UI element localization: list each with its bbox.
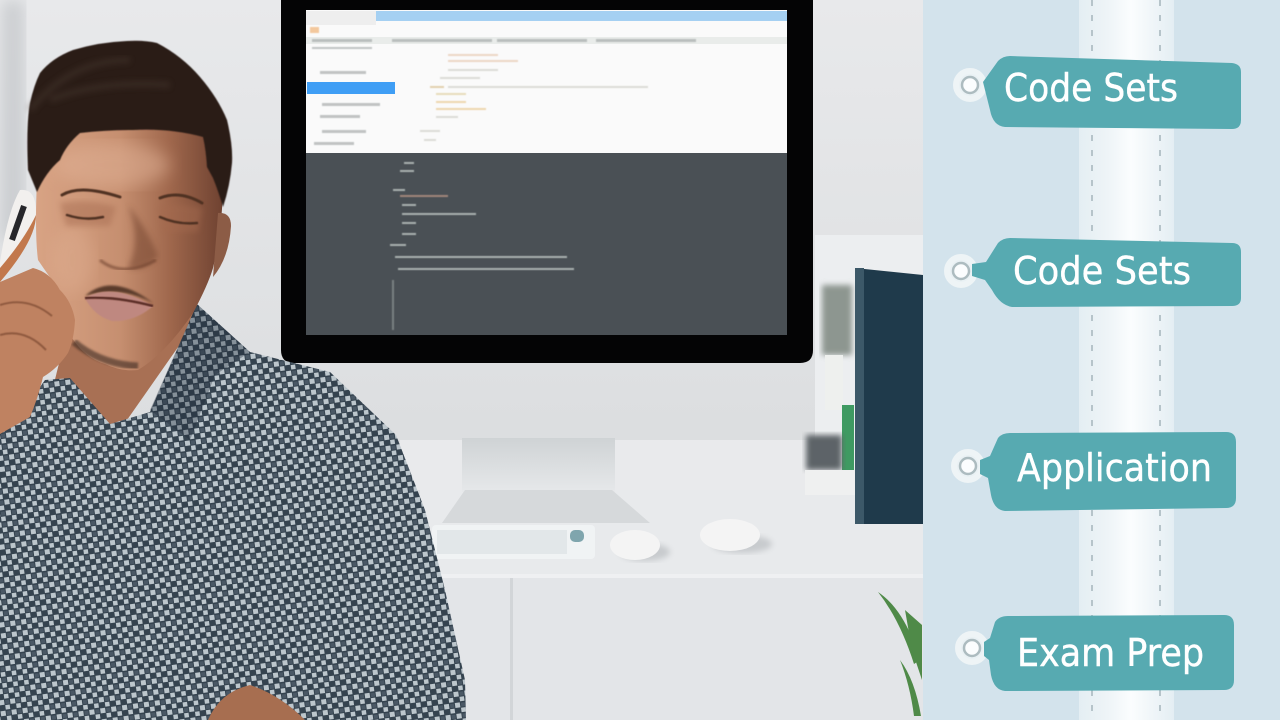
face [36,110,223,370]
moustache [85,286,153,303]
ring [956,71,984,99]
hair [27,41,232,207]
beard [74,342,138,366]
lips [85,292,153,321]
label: Exam Prep [958,615,1234,691]
mouse right [700,519,772,553]
forehead highlight [54,143,170,187]
ear [213,213,231,277]
selected sidebar row [307,82,395,94]
plant [878,592,922,716]
ring [958,634,986,662]
phone [0,190,36,282]
collar shadow [150,304,250,440]
keyboard [432,525,595,559]
tag [983,56,1241,129]
left wall shadow [2,0,24,240]
label: Application [954,432,1236,511]
ring [947,257,975,285]
editor light pane [306,10,787,153]
tag [972,238,1241,307]
monitor [281,0,813,363]
nose shadow [128,205,158,269]
text: Application [1017,446,1212,490]
background wall [0,0,923,720]
mouse left [610,530,670,561]
monitor bezel [281,0,813,363]
text: Code Sets [1004,66,1178,110]
hair fringe [30,60,170,110]
cheek highlight [50,226,94,294]
eye socket shadow [60,201,202,232]
person [0,41,466,720]
right panel [923,0,1280,720]
text: Exam Prep [1017,631,1204,675]
text: Code Sets [1013,249,1191,293]
shelf items [805,285,855,495]
desk back [400,440,815,490]
binder [855,268,923,524]
label: Code Sets 1 [956,56,1241,129]
ring [954,452,982,480]
toolbar [306,37,787,44]
sidebar rows [314,71,380,145]
shirt [0,304,466,720]
monitor stand [442,438,650,523]
desk top [420,490,923,576]
nose tip [100,260,156,269]
cabinet [430,576,923,720]
hand [0,268,75,434]
label: Code Sets 2 [947,238,1241,307]
right shelf wall [815,235,923,495]
tag [984,615,1234,691]
lower hand [208,685,305,720]
light code lines [420,54,648,141]
editor dark pane [306,153,787,335]
browser title bar [375,11,787,21]
desk [400,440,923,720]
finger lines [0,302,52,350]
tag [980,432,1236,511]
timeline strip [1079,0,1174,720]
books and objects [822,285,852,355]
eyebrows and eyes [62,190,202,223]
neck [45,300,197,430]
dark code lines [390,162,574,330]
